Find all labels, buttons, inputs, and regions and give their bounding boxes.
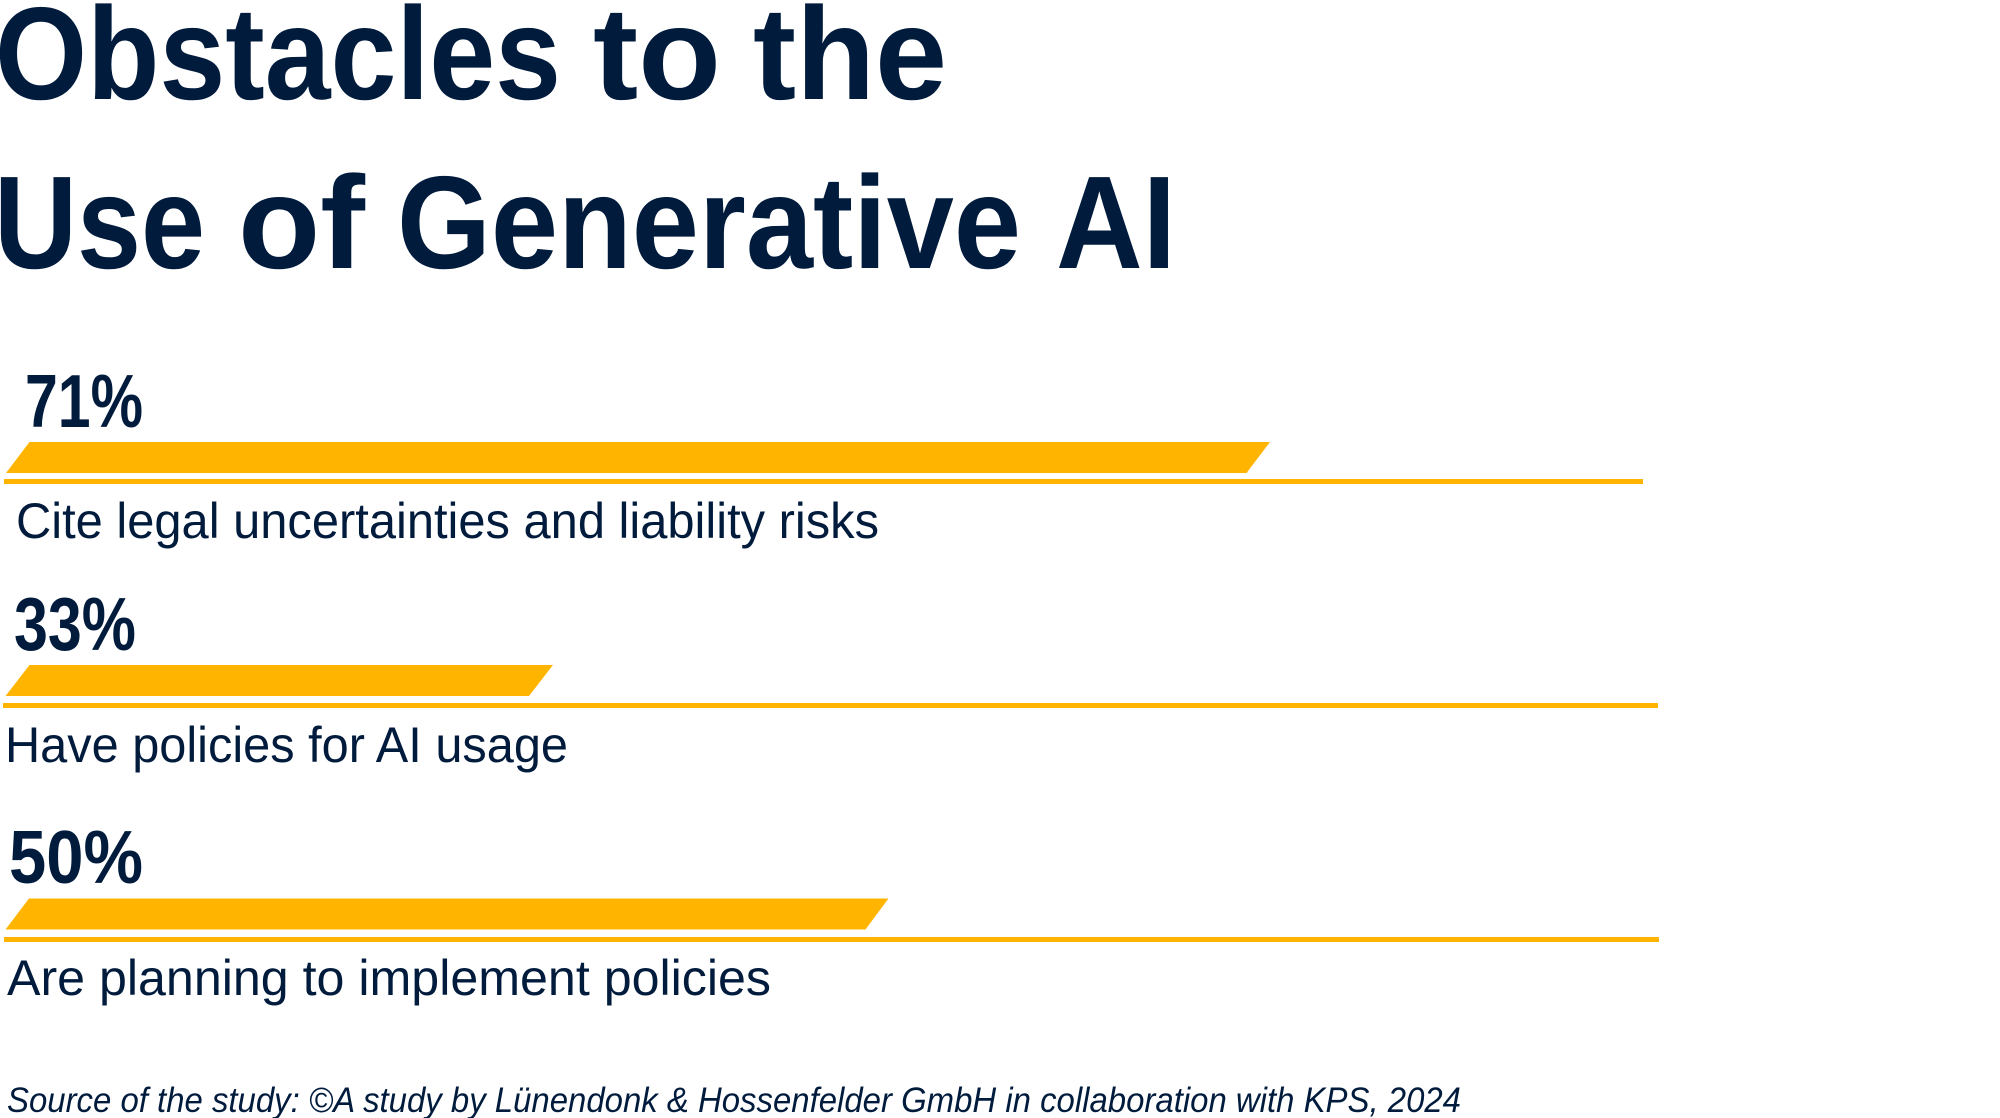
value: 50%: 50% (9, 815, 143, 899)
baseline rule (4, 937, 1659, 942)
value: 33%: 33% (14, 582, 136, 666)
panel: AI policies 33% (3, 582, 1658, 773)
bar: 50% (6, 898, 888, 930)
panel: planning policies 50% (4, 815, 1659, 1006)
panel: legal uncertainties 71% (4, 359, 1643, 549)
title (0, 0, 1176, 296)
title: Generative (397, 149, 1021, 296)
label: planning to implement: Are planning to implement policies (7, 950, 771, 1006)
bar: 71% (6, 442, 1270, 473)
value: 71%: 71% (25, 359, 143, 443)
baseline rule (3, 703, 1658, 708)
title: AI (1056, 149, 1176, 296)
baseline rule (4, 479, 1643, 484)
title: of (238, 149, 366, 296)
bar: 33% (6, 665, 553, 696)
label: have policies: Have policies for AI usage (5, 717, 568, 773)
title: Use (0, 149, 205, 296)
label: legal uncertainties: Cite legal uncertainties and liability risks (16, 493, 879, 549)
